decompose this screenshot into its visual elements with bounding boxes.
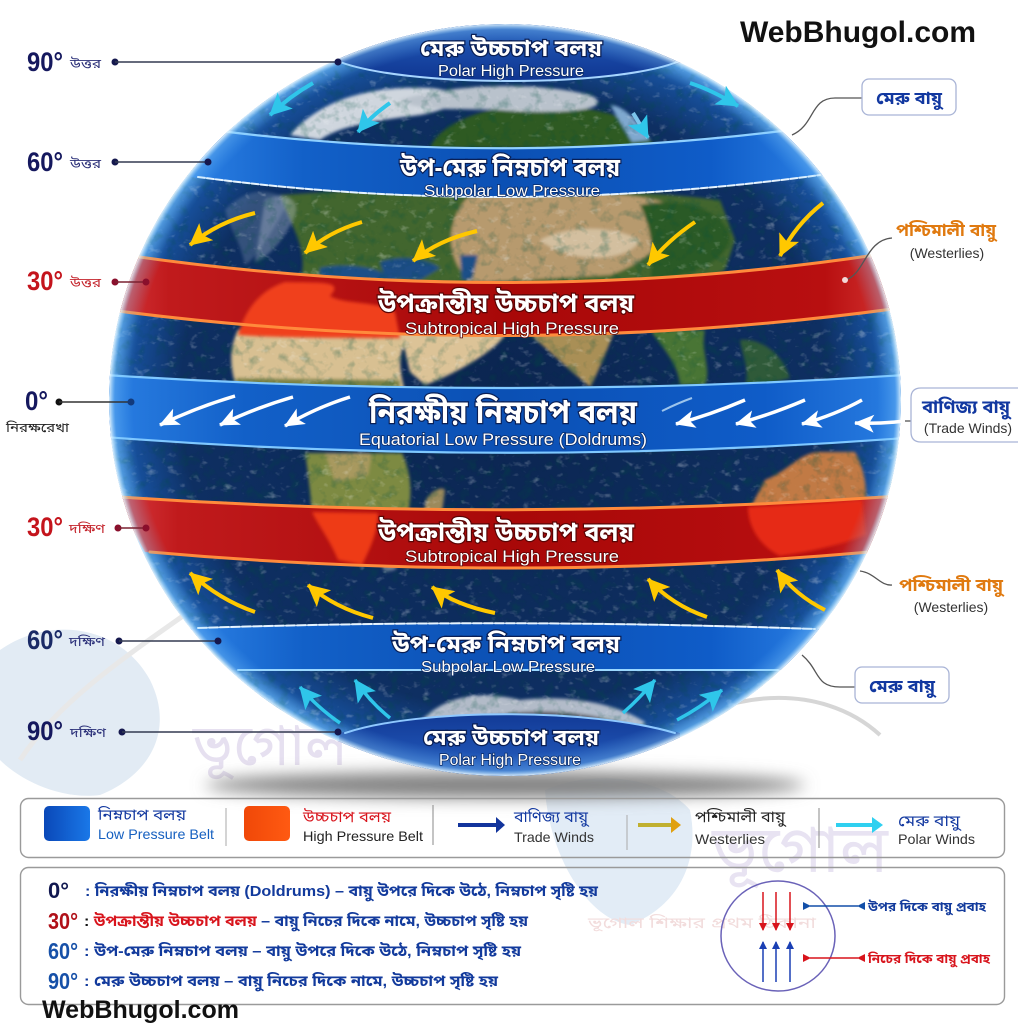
Africa under red band	[238, 282, 400, 338]
callout: trade winds	[905, 388, 1018, 442]
info row: 30 degrees: 30°	[48, 908, 78, 934]
watermark: faded globe and logo: ভূগোল শিক্ষার প্রথম ঠিকানা	[587, 915, 817, 932]
southern Africa under red band	[312, 512, 378, 565]
legend: high pressure	[244, 806, 423, 844]
belt label: subtropical high south: Subtropical High Pressure	[405, 547, 619, 566]
belt label: subpolar low north: Subpolar Low Pressure	[424, 183, 600, 200]
info panel	[20, 868, 1004, 1004]
belt label: subpolar low south: উপ-মেরু নিম্নচাপ বলয়	[391, 630, 621, 658]
band: 30 south subtropical high	[115, 496, 905, 568]
belt label: polar high north: মেরু উচ্চচাপ বলয়	[420, 34, 603, 61]
watermark: faded globe and logo	[0, 590, 889, 932]
info row: 30 degrees: : উপক্রান্তীয় উচ্চচাপ বলয় – বায়ু নিচের দিকে নামে, উচ্চচাপ সৃষ্টি হয়	[84, 911, 529, 933]
band: 60 north subpolar low	[190, 130, 825, 197]
westerlies arrows south	[190, 570, 825, 618]
belt label: subtropical high south: উপক্রান্তীয় উচ্চচাপ বলয়	[377, 516, 635, 547]
latitude label: 30 north	[27, 266, 150, 296]
latitude label: 60 north	[27, 147, 212, 177]
belt label: subpolar low north	[399, 153, 621, 200]
legend panel	[20, 798, 1004, 858]
trade wind arrows	[160, 396, 905, 426]
latitude label: 60 north: 60°	[27, 147, 63, 177]
info row: 90 degrees: 90°	[48, 968, 78, 994]
latitude label: 90 south	[27, 716, 342, 746]
belt label: subtropical high north: উপক্রান্তীয় উচ্চচাপ বলয়	[377, 287, 635, 318]
polar cap north	[338, 24, 680, 80]
callout: polar winds north	[792, 79, 956, 135]
info row: 60 degrees: : উপ-মেরু নিম্নচাপ বলয় – বায়ু উপরে দিকে উঠে, নিম্নচাপ সৃষ্টি হয়	[84, 941, 522, 963]
belt label: polar high north	[420, 34, 603, 80]
latitude label: 30 north: 30°	[27, 266, 63, 296]
latitude label: 30 south	[27, 512, 150, 542]
callout: westerlies south	[860, 571, 1006, 615]
air flow diagram: নিচের দিকে বায়ু প্রবাহ	[867, 951, 991, 968]
band: 60 south subpolar low	[190, 623, 825, 670]
watermark: faded globe and logo: ভূগোল	[711, 812, 889, 889]
latitude label: 60 south: 60°	[27, 625, 63, 655]
surface texture	[100, 20, 910, 780]
latitude label: 30 south: 30°	[27, 512, 63, 542]
legend: polar winds: Polar Winds	[898, 831, 975, 847]
band edge lines	[105, 60, 905, 733]
callout: polar winds south	[802, 655, 949, 703]
callout: westerlies north	[842, 220, 998, 283]
info row: 0 degrees	[48, 878, 599, 903]
globe rim glow	[109, 24, 901, 776]
globe	[100, 0, 910, 790]
info row: 60 degrees: 60°	[48, 938, 78, 964]
belt label: polar high south	[423, 725, 599, 769]
legend: polar winds: মেরু বায়ু	[898, 813, 962, 831]
belt label: equatorial low: নিরক্ষীয় নিম্নচাপ বলয়	[368, 394, 638, 430]
legend: trade winds	[458, 809, 594, 845]
latitude label: equator: নিরক্ষরেখা	[5, 420, 70, 435]
belt label: equatorial low: Equatorial Low Pressure (Doldrums)	[359, 430, 647, 449]
globe ocean base	[109, 24, 901, 776]
latitude label: 30 south: দক্ষিণ	[68, 521, 106, 536]
callout: westerlies south: (Westerlies)	[914, 599, 988, 615]
callout: polar winds north: মেরু বায়ু	[876, 89, 945, 111]
latitude label: 90 south: দক্ষিণ	[69, 725, 107, 740]
latitude label: 60 south: দক্ষিণ	[68, 634, 106, 649]
watermark: faded globe and logo: ভূগোল	[192, 713, 348, 781]
info row: 0 degrees: : নিরক্ষীয় নিম্নচাপ বলয় (Doldrums) – বায়ু উপরে দিকে উঠে, নিম্নচাপ সৃষ্টি হয়	[85, 881, 599, 903]
belt label: equatorial low	[359, 394, 647, 449]
title watermark bottom: WebBhugol.com	[42, 996, 239, 1024]
info row: 0 degrees: 0°	[48, 878, 69, 903]
Australia under red band	[748, 500, 866, 556]
polar wind arrows north	[270, 83, 738, 138]
belt label: polar high south: Polar High Pressure	[439, 752, 581, 769]
polar cap south	[338, 715, 680, 776]
latitude label: 60 north: উত্তর	[69, 156, 101, 171]
legend: low pressure: Low Pressure Belt	[98, 826, 214, 842]
info row: 60 degrees	[48, 938, 522, 964]
land masses and clouds	[225, 86, 866, 735]
globe shadow	[205, 772, 805, 798]
legend: westerlies: Westerlies	[695, 831, 765, 847]
legend: trade winds: বাণিজ্য বায়ু	[513, 809, 589, 827]
belt label: polar high north: Polar High Pressure	[438, 63, 584, 80]
legend: westerlies	[638, 809, 787, 847]
latitude label: equator	[5, 386, 135, 435]
legend: high pressure: High Pressure Belt	[303, 828, 423, 844]
legend: low pressure: নিম্নচাপ বলয়	[97, 807, 187, 824]
legend: westerlies: পশ্চিমালী বায়ু	[695, 809, 787, 827]
belt label: subtropical high north: Subtropical High Pressure	[405, 319, 619, 338]
belt label: subpolar low south	[391, 630, 621, 676]
callout: westerlies north: পশ্চিমালী বায়ু	[896, 220, 998, 243]
belt label: subpolar low north: উপ-মেরু নিম্নচাপ বলয়	[399, 153, 621, 182]
belt label: subtropical high south	[377, 516, 635, 566]
westerlies arrows north	[190, 203, 823, 265]
belt label: subtropical high north	[377, 287, 635, 338]
callout: westerlies south: পশ্চিমালী বায়ু	[899, 575, 1006, 598]
air flow diagram	[721, 881, 991, 991]
latitude label: 90 north	[27, 47, 342, 77]
latitude label: 90 north: উত্তর	[69, 56, 101, 71]
callout: polar winds south: মেরু বায়ু	[869, 677, 938, 699]
belt label: subpolar low south: Subpolar Low Pressure	[421, 659, 595, 676]
polar wind arrows south	[300, 680, 722, 723]
belt label: polar high south: মেরু উচ্চচাপ বলয়	[423, 725, 599, 750]
info row: 30 degrees	[48, 908, 529, 934]
legend: low pressure	[44, 806, 214, 842]
callout: westerlies north: (Westerlies)	[910, 245, 984, 261]
latitude label: 90 north: 90°	[27, 47, 63, 77]
latitude label: 90 south: 90°	[27, 716, 63, 746]
info row: 90 degrees	[48, 968, 499, 994]
legend: polar winds	[836, 813, 975, 847]
air flow diagram: উপর দিকে বায়ু প্রবাহ	[867, 899, 987, 916]
callout: trade winds: (Trade Winds)	[924, 420, 1012, 436]
band: 30 north subtropical high	[105, 255, 905, 336]
title watermark top: WebBhugol.com	[740, 16, 976, 49]
legend: trade winds: Trade Winds	[514, 829, 594, 845]
latitude label: 30 north: উত্তর	[69, 275, 101, 290]
legend: high pressure: উচ্চচাপ বলয়	[302, 809, 392, 826]
callout: trade winds: বাণিজ্য বায়ু	[921, 397, 1012, 420]
latitude label: equator: 0°	[25, 386, 48, 416]
band: equatorial low	[100, 375, 910, 453]
latitude label: 60 south	[27, 625, 222, 655]
info row: 90 degrees: : মেরু উচ্চচাপ বলয় – বায়ু নিচের দিকে নামে, উচ্চচাপ সৃষ্টি হয়	[84, 971, 499, 993]
